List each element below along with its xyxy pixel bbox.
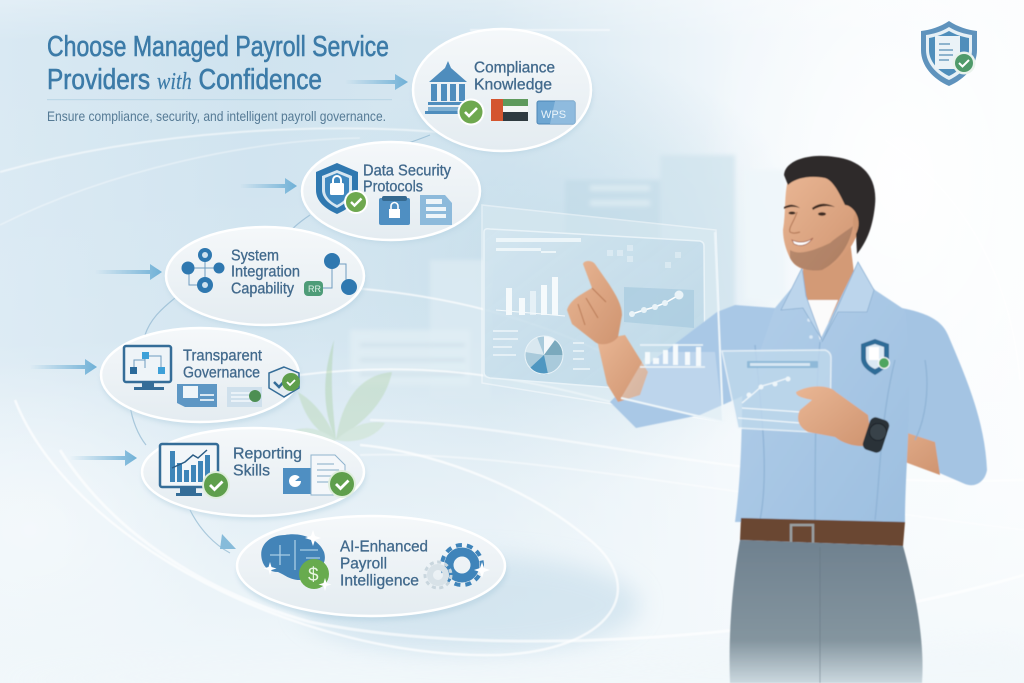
title: Providers with Confidence: [47, 64, 322, 96]
label: Intelligence: [340, 572, 419, 590]
shirt buttons: [807, 318, 813, 339]
wristwatch: [861, 416, 891, 454]
neck: [800, 240, 856, 330]
icon: padlock folder: [379, 196, 410, 225]
icon: dollar coin: $: [308, 565, 319, 586]
smile: [792, 238, 813, 246]
trousers: [730, 540, 923, 683]
icon: info card: [177, 384, 217, 407]
icon: check badge: [202, 471, 230, 499]
icon: security shield: [316, 163, 358, 214]
holographic dashboard: [482, 205, 723, 422]
eyes and brows: [784, 204, 835, 216]
label: Integration: [231, 264, 300, 280]
icon: sparkles: [264, 530, 332, 591]
icon: check badge: [458, 98, 484, 126]
plant: [290, 340, 392, 444]
collar: [781, 262, 874, 342]
title: Choose Managed Payroll Service: [47, 31, 389, 63]
label: [363, 162, 451, 196]
label: Data Security: [363, 162, 451, 180]
finger lines: [578, 288, 606, 325]
dashboard headers: [496, 238, 681, 268]
label: Governance: [183, 364, 260, 382]
placket and fold shading: [755, 342, 927, 522]
icon: dollar coin: [299, 559, 329, 589]
background office building: [350, 155, 785, 400]
small text lines: [493, 331, 590, 369]
left forearm: [597, 335, 648, 402]
icon: AI brain: [261, 534, 325, 580]
corner shield logo: [921, 21, 977, 86]
icon: connected nodes: [304, 253, 357, 296]
stage 3: system integration capability: [166, 227, 366, 328]
bar chart overlay: [645, 344, 701, 366]
icon: monitor chart: [160, 444, 218, 496]
label: [340, 538, 428, 590]
check badge: [952, 52, 976, 74]
man: [567, 156, 987, 683]
label: AI-Enhanced: [340, 538, 428, 556]
icon: document: [420, 195, 452, 225]
flow arrows: [30, 74, 408, 549]
bar chart: [496, 277, 565, 316]
connector lines between stages: [130, 135, 430, 553]
label: Protocols: [363, 178, 423, 196]
label: [474, 60, 555, 94]
icon: monitor flowchart: [124, 346, 171, 390]
label: [183, 348, 263, 382]
icon: WPS card: [537, 101, 575, 124]
icon: integration network: [182, 248, 224, 293]
stage 5: reporting skills: [142, 428, 366, 520]
belt: [740, 518, 905, 546]
label: Skills: [233, 462, 270, 480]
label: [233, 446, 302, 480]
pie chart: [525, 336, 563, 374]
hair: [784, 156, 875, 254]
undershirt: [802, 300, 838, 342]
label: Knowledge: [474, 76, 552, 94]
belt buckle: [791, 525, 813, 545]
icon: check badge: [328, 470, 356, 498]
glass tint over sleeve: [621, 352, 723, 422]
label: Compliance: [474, 60, 555, 76]
label: System: [231, 248, 279, 264]
line chart: [624, 287, 694, 328]
label: Capability: [231, 280, 294, 298]
title: [47, 31, 389, 96]
stage 4: transparent governance: [101, 328, 301, 426]
label: [231, 248, 300, 298]
icon: chart card and document: [283, 455, 345, 495]
icon: WPS card: WPS: [541, 109, 566, 121]
torso: [735, 268, 909, 522]
subtitle: Ensure compliance, security, and intelligent payroll governance.: [47, 108, 386, 124]
face: [783, 172, 865, 270]
icon: UAE flag: [491, 99, 528, 121]
label: Reporting: [233, 446, 302, 462]
icon: connected nodes: RR: [308, 284, 321, 294]
panel overlay on sleeve: [621, 232, 723, 422]
right sleeve: [885, 305, 987, 485]
title underline: [47, 99, 392, 100]
label: Payroll: [340, 556, 387, 572]
stage 1: compliance knowledge: [413, 29, 593, 154]
handheld tablet: [722, 350, 831, 433]
stage 6: AI-enhanced payroll intelligence: [237, 516, 507, 621]
pointing hand: [567, 261, 622, 344]
icon: gears: [425, 545, 490, 588]
shirt shield logo: [861, 339, 890, 375]
icon: government building: [425, 61, 473, 114]
trousers centre seam: [819, 547, 821, 683]
beard shadow: [790, 226, 853, 270]
label: Transparent: [183, 348, 263, 364]
icon: check badge: [344, 190, 368, 214]
icon: document with check: [227, 387, 262, 407]
ear: [853, 210, 867, 234]
nose: [790, 212, 800, 233]
right forearm: [868, 420, 940, 475]
stage 2: data security protocols: [302, 142, 482, 243]
holding hand: [796, 386, 872, 446]
left sleeve: [610, 305, 775, 428]
icon: shield with check: [269, 367, 300, 397]
